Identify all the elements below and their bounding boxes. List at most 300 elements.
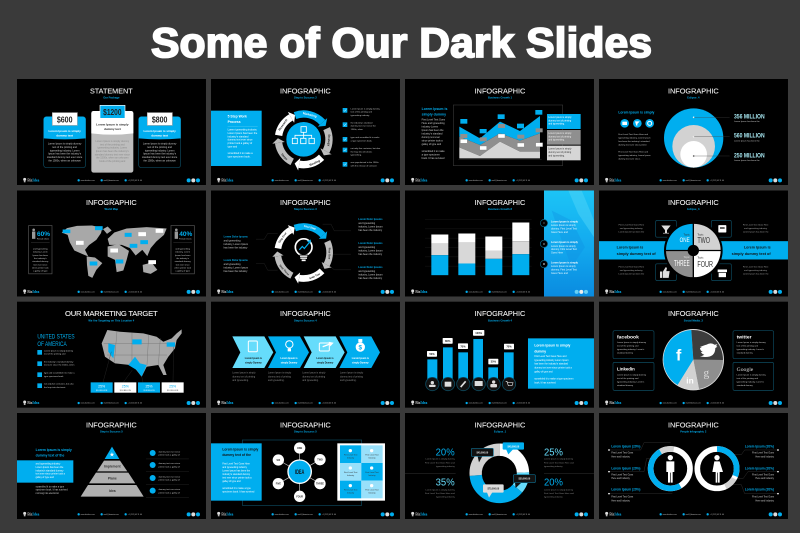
value labels: 80% bbox=[445, 339, 451, 343]
pricing card: $800: standard dummy text ever since bbox=[142, 156, 178, 159]
footer bbox=[605, 401, 782, 405]
footer bbox=[23, 178, 200, 182]
footer: www.bizidea.com bbox=[663, 514, 677, 516]
numbered callouts: Lorem Ipsum is simply bbox=[551, 220, 579, 223]
captions: and typesetting. bbox=[340, 379, 357, 382]
left text: Ipsum has been the bbox=[422, 129, 444, 132]
right labels: Here and Industry bbox=[755, 499, 775, 502]
footer: BizIdea bbox=[609, 290, 621, 294]
statistic labels: Lorem Ipsum has been the bbox=[734, 159, 760, 162]
pricing card: $800 bbox=[139, 113, 181, 168]
card: facebook: standard dummy bbox=[617, 352, 634, 355]
checker grid: Industry bbox=[368, 456, 376, 459]
card: linkedin bbox=[613, 362, 654, 390]
checker grid: Industry bbox=[368, 492, 376, 495]
centre disc with org chart icon bbox=[286, 122, 321, 157]
left text and icons: dummy text ever since. bbox=[618, 157, 641, 160]
subheading: Business Growth 4 bbox=[488, 318, 513, 322]
blue text panel: scrambled it to make a bbox=[228, 152, 253, 155]
left text and icons: First Level Text Goes Here and bbox=[618, 150, 649, 153]
social pie: g bbox=[703, 368, 709, 380]
card: linkedin: Lorem Ipsum is simply dummy bbox=[617, 374, 646, 376]
checker grid: First Level Text bbox=[365, 454, 379, 456]
pie with black outline: ONE bbox=[680, 237, 690, 244]
left callouts: industry, Lorem Ipsum bbox=[224, 266, 248, 269]
right statistics: 20% bbox=[544, 478, 563, 489]
chevron 3: Lorem Ipsum is bbox=[316, 358, 334, 360]
heading: INFOGRAPHIC bbox=[668, 420, 719, 429]
card: linkedin: typesetting industry. Lorem's bbox=[617, 380, 644, 383]
connector lines bbox=[609, 443, 778, 494]
footer: +1 (212) 45 11 44 bbox=[128, 514, 142, 516]
right labels: First Level Text Goes bbox=[752, 497, 774, 499]
pricing card: $800: typesetting industry. Lorem bbox=[145, 149, 174, 152]
right legend: printer took a galley of bbox=[159, 491, 180, 494]
left text block: industry's standard dummy bbox=[36, 469, 64, 472]
card: facebook bbox=[613, 331, 654, 359]
checklist: typesetting. bbox=[351, 154, 362, 157]
pricing card: $800: Ipsum has been the industry's bbox=[143, 153, 177, 156]
numbered callouts: dummy. First Level Text bbox=[551, 248, 577, 251]
blue band bbox=[599, 241, 788, 259]
footer: mail@domain.com bbox=[492, 291, 507, 293]
icon circles bbox=[426, 377, 516, 391]
donut bbox=[466, 440, 533, 507]
chevron 3: simply Dummy bbox=[317, 362, 334, 364]
outline frame bbox=[242, 440, 362, 505]
footer bbox=[411, 512, 588, 516]
left text block: scrambled it to make a type bbox=[36, 486, 64, 488]
footer: www.bizidea.com bbox=[81, 180, 95, 182]
heading: INFOGRAPHIC bbox=[475, 86, 526, 95]
subheading: World Map bbox=[105, 207, 118, 211]
slide: stacked bar chart bbox=[405, 190, 594, 296]
left statistics bbox=[425, 447, 456, 499]
checklist: the leap into electronic bbox=[44, 386, 66, 389]
left text: Lorem Ipsum is bbox=[422, 107, 447, 111]
pie with black outline bbox=[664, 221, 723, 280]
subheading: Our Package bbox=[103, 96, 120, 100]
footer: mail@domain.com bbox=[686, 403, 701, 405]
pyramid: ★ bbox=[109, 451, 115, 458]
pricing card: $1200: the 1500s, when an unknown bbox=[96, 157, 129, 160]
pricing card: $1200: $1200 bbox=[103, 108, 122, 117]
legend boxes: and typesetting. bbox=[548, 154, 565, 157]
budget boxes: 25% bbox=[98, 384, 105, 388]
slide: pyramid bbox=[17, 413, 206, 519]
checklist: was popularised in the 1960s bbox=[351, 162, 379, 164]
captions: Lorem Ipsum is simply bbox=[232, 373, 256, 375]
right stat panel: Ipsum has been bbox=[175, 255, 191, 257]
hub and spoke diagram: FOUR bbox=[296, 496, 303, 498]
left callouts: has been the industry bbox=[224, 246, 248, 249]
budget boxes: $1.8 BILLION bbox=[143, 390, 155, 392]
card: google bbox=[733, 362, 774, 390]
footer: mail@domain.com bbox=[492, 403, 507, 405]
ring: male bbox=[643, 442, 697, 496]
checker grid: Industry bbox=[347, 492, 354, 495]
footer: BizIdea bbox=[221, 512, 233, 516]
chevron 1: Lorem Ipsum is bbox=[245, 358, 262, 360]
footer: BizIdea bbox=[27, 512, 39, 516]
pricing card: $1200: book of the printing and bbox=[99, 160, 126, 163]
footer: mail@domain.com bbox=[686, 291, 701, 293]
footer: www.bizidea.com bbox=[469, 403, 483, 405]
pie with black outline: THREE bbox=[674, 259, 690, 268]
subheading: Social Media_3 bbox=[684, 318, 703, 322]
statistic labels bbox=[734, 113, 765, 162]
blue text panel: Lorem Ipsum has been the bbox=[222, 469, 251, 472]
checklist: text of the printing and bbox=[44, 353, 66, 356]
footer bbox=[217, 178, 394, 182]
left text: book. It has survived bbox=[422, 157, 445, 160]
subheading: Business Growth 1 bbox=[488, 96, 513, 100]
heading: INFOGRAPHIC bbox=[280, 86, 331, 95]
left text: First Level Text Goes bbox=[422, 118, 445, 121]
value labels bbox=[427, 330, 514, 364]
footer: www.bizidea.com bbox=[469, 180, 483, 182]
pricing card: $1200: Lorem Ipsum is simply dummy bbox=[96, 140, 129, 143]
left text: industry's standard bbox=[422, 132, 443, 135]
blue text panel bbox=[528, 338, 594, 389]
footer: +1 (212) 45 11 44 bbox=[322, 180, 336, 182]
heading: INFOGRAPHIC bbox=[668, 86, 719, 95]
side text: First Level Text Goes Here bbox=[743, 266, 768, 268]
left text block bbox=[17, 448, 73, 495]
footer: www.bizidea.com bbox=[275, 291, 289, 293]
right labels: Here and Industry bbox=[755, 455, 775, 458]
left text and icons: typesetting industry, Lorem Ipsum bbox=[618, 154, 651, 157]
checklist bbox=[37, 349, 75, 389]
left labels: First Level Text Goes bbox=[611, 474, 633, 476]
right callouts: has been the industry bbox=[358, 277, 383, 280]
hub and spoke diagram: ONE bbox=[297, 448, 303, 450]
footer bbox=[23, 401, 200, 405]
footer: BizIdea bbox=[609, 512, 621, 516]
left text bbox=[422, 107, 447, 160]
footer: BizIdea bbox=[221, 401, 233, 405]
USA map bbox=[102, 329, 182, 377]
captions: dummy text of printing bbox=[340, 375, 364, 378]
blue text panel: First Level Text Goes Here bbox=[222, 463, 250, 465]
footer: mail@domain.com bbox=[298, 403, 313, 405]
checker grid: Industry bbox=[368, 474, 376, 477]
pricing card: $800: dummy text bbox=[151, 133, 168, 137]
numbered callouts bbox=[540, 219, 579, 275]
footer: +1 (212) 45 11 44 bbox=[322, 514, 336, 516]
footer bbox=[217, 289, 394, 294]
numbered callouts: II bbox=[543, 242, 545, 246]
right stat panel: Female Users bbox=[179, 237, 191, 240]
left statistics: 20% bbox=[436, 447, 455, 458]
pricing card: $800: the 1500s, when an unknown bbox=[143, 159, 176, 162]
footer: www.bizidea.com bbox=[469, 514, 483, 516]
chart frame bbox=[453, 105, 563, 166]
left text and icons: Lorem Ipsum is simply bbox=[618, 111, 655, 115]
right legend: dummy text ever since bbox=[159, 451, 180, 453]
right callouts: Lorem Dolor Ipsums bbox=[358, 242, 383, 245]
footer bbox=[217, 401, 394, 405]
pricing card: $1200 bbox=[91, 105, 133, 173]
blue text panel: text ever since printer took a bbox=[222, 476, 252, 479]
left labels: First Level Text Goes bbox=[611, 497, 633, 499]
slide: bar chart with icons bbox=[405, 302, 594, 408]
slide: world map bbox=[17, 190, 206, 296]
left text: galley of type and bbox=[422, 143, 442, 146]
slide: marketing target USA bbox=[17, 302, 206, 408]
left text: since printer took a bbox=[422, 139, 443, 142]
checker grid: First Level Text bbox=[365, 472, 379, 474]
blue text panel: Lorem Ipsum has been the bbox=[228, 132, 258, 135]
card: linkedin: standard dummy bbox=[617, 384, 634, 387]
hub and spoke diagram: FIVE bbox=[276, 484, 281, 486]
budget boxes: $1.8 BILLION bbox=[96, 390, 108, 392]
blue band: Lorem Ipsum is bbox=[617, 245, 643, 249]
heading: INFOGRAPHIC bbox=[86, 420, 137, 429]
blue text panel bbox=[211, 443, 262, 501]
right labels: Lorem Ipsum (20%) bbox=[745, 466, 774, 470]
donut callouts: $45,000.00 bbox=[476, 452, 489, 455]
blue text panel: industry's standard bbox=[228, 135, 249, 138]
blue text panel: dummy text ever since bbox=[228, 139, 253, 142]
blue text panel bbox=[211, 111, 262, 166]
value labels: 70% bbox=[506, 345, 512, 349]
value labels: 50% bbox=[429, 352, 435, 356]
captions: dummy text of printing bbox=[268, 375, 292, 378]
value labels: 35% bbox=[491, 360, 497, 364]
left labels: First Level Text Goes bbox=[611, 453, 633, 455]
circular five-arrow cycle: Marketing bbox=[302, 111, 317, 118]
slide: five step work process bbox=[211, 79, 400, 185]
slide: donut chart bbox=[405, 413, 594, 519]
numbered callouts: dummy. First Level Text bbox=[551, 227, 577, 230]
blue text panel: specimen book. It has survived bbox=[222, 490, 255, 493]
left callouts bbox=[224, 235, 248, 273]
heading: STATEMENT bbox=[90, 86, 133, 95]
footer: BizIdea bbox=[415, 290, 427, 294]
pricing card: $600: Ipsum has been the industry's bbox=[48, 153, 82, 156]
checklist: dummy text ever since the bbox=[351, 125, 377, 128]
right labels: First Level Text Goes bbox=[752, 453, 774, 455]
footer bbox=[605, 178, 782, 182]
pricing card: $600: the 1500s, when an unknown bbox=[48, 159, 81, 162]
left statistics: Lorem Ipsum is simply dummy bbox=[426, 458, 456, 461]
subheading: Step to Success 5 bbox=[294, 430, 317, 434]
left text block: dummy text of the bbox=[36, 454, 64, 458]
legend boxes: dummy text of printing bbox=[548, 151, 572, 154]
footer: www.bizidea.com bbox=[663, 291, 677, 293]
checklist: type specimen book. bbox=[44, 375, 64, 378]
circular four-arrow cycle: Step Four bbox=[277, 231, 288, 244]
subheading: Step to Success 3 bbox=[294, 207, 317, 211]
left stat panel: the industry's bbox=[34, 257, 47, 260]
country name: UNITED STATES bbox=[37, 334, 75, 341]
pyramid: Implement bbox=[104, 464, 122, 468]
left statistics: typesetting industry bbox=[436, 465, 456, 468]
blue text panel: industry's standard dummy bbox=[222, 473, 251, 476]
left callouts: has been the industry bbox=[224, 270, 248, 273]
blue text panel: Lorem Ipsum is simply bbox=[222, 447, 258, 451]
left text: scrambled it to make bbox=[422, 150, 445, 153]
pie with black outline: Topic bbox=[683, 232, 690, 236]
chevron 2: Lorem Ipsum is bbox=[280, 358, 298, 360]
footer bbox=[217, 512, 394, 516]
footer: +1 (212) 45 11 44 bbox=[322, 403, 336, 405]
heading: INFOGRAPHIC bbox=[668, 309, 719, 318]
legend boxes: Lorem Ipsum is simply bbox=[548, 149, 571, 151]
blue text panel: type specimen book. bbox=[228, 155, 251, 158]
chevron 4: Lorem Ipsum is bbox=[352, 358, 369, 360]
left labels: Here and Industry bbox=[611, 455, 631, 458]
right legend: dummy text ever since bbox=[159, 489, 180, 491]
statistic labels: 250 MILLION bbox=[734, 153, 765, 160]
footer: BizIdea bbox=[27, 401, 39, 405]
side text: First Level Text Goes Here bbox=[743, 224, 768, 226]
legend boxes: and typesetting. bbox=[548, 123, 565, 126]
slide: lightbulb cycle bbox=[211, 190, 400, 296]
captions: and typesetting. bbox=[232, 379, 249, 382]
donut callouts: $75,000.00 bbox=[487, 489, 500, 491]
pricing card: $1200: typesetting industry. Lorem bbox=[97, 147, 127, 150]
card: twitter: typesetting industry. Lorem's bbox=[737, 348, 764, 351]
numbered callouts: Lorem Ipsum is simply bbox=[551, 245, 576, 248]
right callouts: has been the industry bbox=[358, 253, 383, 256]
legend boxes: dummy text of printing bbox=[548, 135, 572, 138]
chevron 4: $ bbox=[359, 344, 363, 351]
footer: +1 (212) 45 11 44 bbox=[516, 403, 530, 405]
pricing card: $600: Lorem Ipsum is simply dummy bbox=[48, 143, 81, 146]
pricing card: $600: standard dummy text ever since bbox=[47, 156, 83, 159]
blue text panel: dummy text of the bbox=[222, 453, 251, 457]
left statistics: Lorem Ipsum is simply dummy bbox=[426, 488, 456, 491]
right callouts: and typesetting bbox=[358, 246, 375, 249]
statistic labels: Lorem Ipsum has been the bbox=[734, 139, 760, 142]
footer: mail@domain.com bbox=[298, 514, 313, 516]
left stat panel bbox=[29, 225, 52, 274]
subheading: People Infographic 2 bbox=[680, 430, 707, 434]
numbered callouts: dummy. First Level Text bbox=[551, 268, 577, 271]
circular four-arrow cycle: Step One bbox=[327, 247, 332, 260]
subheading: Eclipse_3 bbox=[687, 207, 700, 211]
right statistics: typesetting industry bbox=[544, 465, 563, 468]
side text: First Level Text Goes Here bbox=[619, 224, 644, 226]
chevron 4 bbox=[339, 336, 380, 368]
legend boxes: dummy text of printing bbox=[548, 119, 572, 122]
footer: mail@domain.com bbox=[104, 291, 119, 293]
captions bbox=[232, 372, 364, 382]
card: google: typesetting industry. Lorem's bbox=[737, 380, 764, 383]
legend boxes: and typesetting. bbox=[548, 139, 565, 142]
hub and spoke diagram: THREE bbox=[316, 484, 324, 486]
left text block: specimen book. It has survived bbox=[36, 489, 68, 492]
donut callouts bbox=[471, 442, 535, 498]
footer bbox=[23, 512, 200, 516]
card: twitter: Lorem Ipsum is simply dummy bbox=[737, 342, 766, 344]
side text: First Level Text Goes Here bbox=[619, 266, 644, 268]
footer: mail@domain.com bbox=[298, 291, 313, 293]
donut callouts: $45,000.00 bbox=[507, 445, 520, 448]
card: google: standard dummy bbox=[737, 384, 754, 387]
hub and spoke diagram: IDEA bbox=[295, 470, 305, 476]
heading: INFOGRAPHIC bbox=[280, 420, 331, 429]
pricing card: $800: Lorem Ipsum is simply dummy bbox=[143, 143, 176, 146]
checklist bbox=[343, 107, 381, 167]
footer: BizIdea bbox=[609, 178, 621, 182]
left text block: Lorem Ipsum is simply bbox=[36, 448, 72, 452]
statistic labels: 356 MILLION bbox=[734, 113, 765, 120]
left stat panel: Ipsum has been bbox=[33, 255, 49, 257]
numbered callouts: Lorem Ipsum is simply bbox=[551, 265, 576, 268]
blue band: simply dummy text of bbox=[732, 252, 771, 256]
captions: Lorem Ipsum is simply bbox=[302, 373, 325, 375]
left text: Here and typesetting bbox=[422, 122, 445, 125]
slide: four topic pie bbox=[599, 190, 788, 296]
left callouts: industry, Lorem Ipsum bbox=[224, 243, 248, 246]
statistic labels: 560 MILLION bbox=[734, 133, 765, 140]
pricing card: $800: $800 bbox=[152, 115, 168, 124]
numbered callouts: Lorem Ipsum is simply bbox=[551, 241, 579, 244]
footer: mail@domain.com bbox=[492, 514, 507, 516]
left labels: Lorem Ipsum (20%) bbox=[611, 445, 640, 449]
footer: BizIdea bbox=[609, 401, 621, 405]
right statistics: First Level Text Goes Here and bbox=[544, 461, 574, 464]
right statistics: 25% bbox=[544, 447, 563, 458]
left text: dummy text ever bbox=[422, 136, 440, 139]
footer: +1 (212) 45 11 44 bbox=[128, 180, 142, 182]
captions: dummy text of printing bbox=[232, 375, 256, 378]
right stat panel: a galley of type bbox=[175, 270, 191, 273]
divider lines bbox=[405, 472, 594, 474]
checklist: type and scrambled it to make bbox=[351, 137, 379, 139]
footer: mail@domain.com bbox=[686, 514, 701, 516]
blue text panel: typesetting industry Lorem Ipsum bbox=[534, 359, 569, 362]
left statistics: First Level Text Goes Here and bbox=[425, 461, 455, 464]
right callouts: industry, Lorem Ipsum bbox=[358, 249, 383, 252]
pricing card: $1200: standard dummy text ever since bbox=[95, 153, 131, 156]
slide: area chart bbox=[405, 79, 594, 185]
left text and icons: dummy text ever since printer bbox=[618, 143, 647, 146]
footer: +1 (212) 45 11 44 bbox=[710, 180, 724, 182]
card: twitter bbox=[733, 331, 774, 359]
right callouts: industry, Lorem Ipsum bbox=[358, 226, 383, 229]
pie with black outline: Topic bbox=[697, 232, 704, 236]
chevron 2: simply Dummy bbox=[281, 362, 298, 364]
pricing card: $1200: Ipsum has been the industry's bbox=[96, 150, 130, 153]
left callouts: Lorem Dolor Ipsums bbox=[224, 235, 248, 238]
checklist: 1500s, when bbox=[351, 129, 364, 131]
heading: INFOGRAPHIC bbox=[280, 198, 331, 207]
captions: dummy text of printing bbox=[302, 375, 326, 378]
right statistics: Lorem Ipsum is simply dummy bbox=[544, 458, 574, 461]
left text: a type specimen bbox=[422, 153, 440, 156]
blue text panel: printer took a galley of bbox=[228, 142, 252, 145]
budget boxes: $1.8 BILLION bbox=[120, 390, 132, 392]
captions: Lorem Ipsum is simply bbox=[340, 373, 363, 375]
chevron 1 bbox=[232, 336, 273, 368]
side text: and typesetting industry, bbox=[744, 269, 768, 272]
right callouts: has been the industry bbox=[358, 229, 383, 232]
pyramid: Idea bbox=[109, 489, 116, 493]
left statistics: 35% bbox=[436, 478, 455, 489]
blue text panel: Lorem typesetting industry bbox=[228, 129, 257, 132]
footer: +1 (212) 45 11 44 bbox=[128, 291, 142, 293]
circular five-arrow cycle: Steps bbox=[280, 152, 289, 161]
footer: mail@domain.com bbox=[104, 514, 119, 516]
right statistics: First Level Text Goes Here and bbox=[544, 492, 574, 495]
heading: INFOGRAPHIC bbox=[475, 420, 526, 429]
footer: www.bizidea.com bbox=[81, 514, 95, 516]
footer: BizIdea bbox=[221, 290, 233, 294]
